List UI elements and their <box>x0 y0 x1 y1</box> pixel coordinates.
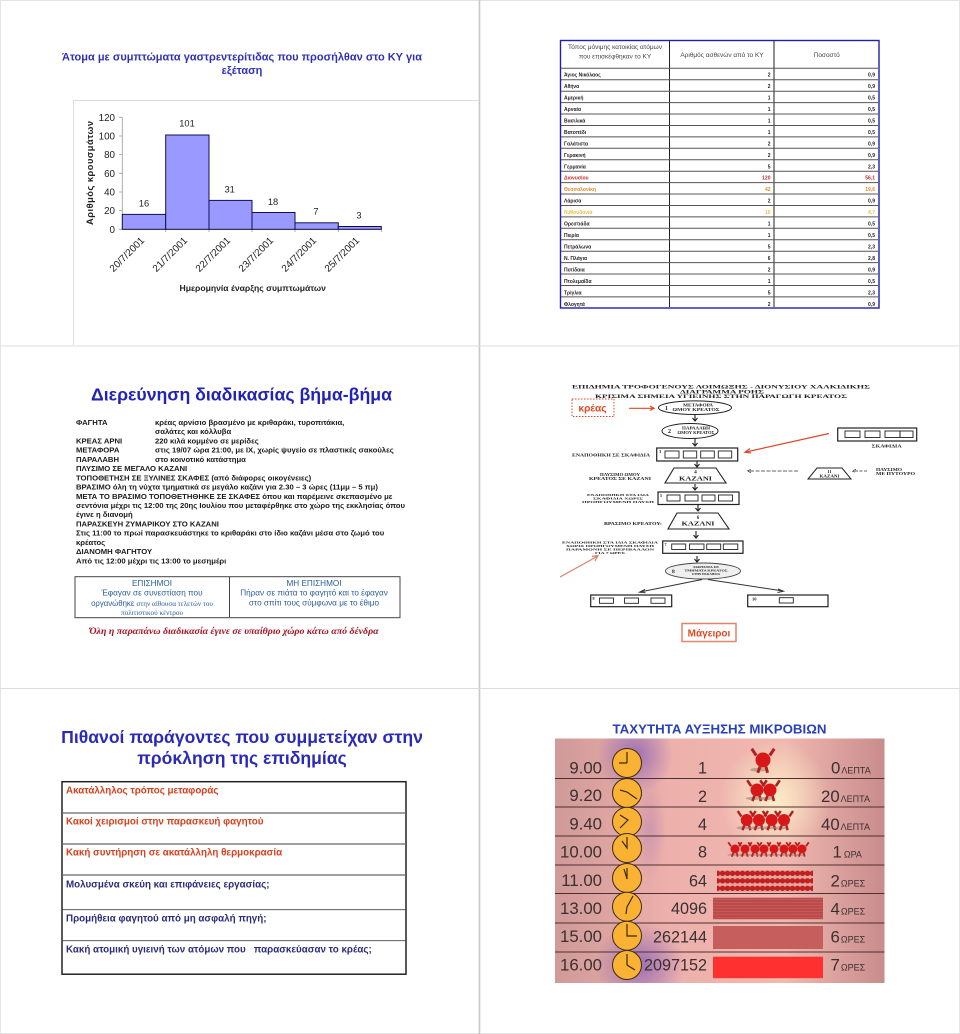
callout: meat <box>572 399 614 416</box>
table rows: Ποτίδαια <box>564 268 586 274</box>
step 7: 7 <box>664 542 666 547</box>
step 6: ΚΑΖΑΝΙ <box>682 522 715 528</box>
table rows: Αθήνα <box>564 84 580 90</box>
heading: Διερεύνηση διαδικασίας βήμα-βήμα <box>91 384 392 404</box>
step 1: ΩΜΟΥ ΚΡΕΑΤΟΣ <box>672 408 721 412</box>
table rows: 2,3 <box>868 290 875 296</box>
step 6 <box>668 513 729 529</box>
panel: possible factors <box>61 727 423 974</box>
table rows: Διονυσίου <box>564 176 589 182</box>
elapsed times: 6ΩΡΕΣ <box>830 928 866 946</box>
text block: procedure <box>76 418 405 565</box>
table rows: 1 <box>768 222 771 228</box>
step 5 <box>658 492 739 504</box>
step 2: ΩΜΟΥ ΚΡΕΑΤΟΣ <box>678 431 715 435</box>
table rows: 2,3 <box>868 244 875 250</box>
step 8: ΣΤΗΝ ΕΚΚΛΗΣΙΑ <box>692 572 721 576</box>
bar chart: cases per day: 120 <box>99 113 116 124</box>
arrow: meat to step 1 <box>629 406 654 410</box>
table rows: Ν. Πλάγια <box>564 256 588 262</box>
elapsed times: 4ΩΡΕΣ <box>830 900 866 918</box>
microbes: one to sixty-four <box>717 749 813 892</box>
bar chart: cases per day: 22/7/2001 <box>194 235 233 275</box>
callout: cooks: Μάγειροι <box>688 628 731 640</box>
table rows: Γαλάτιστα <box>564 141 589 147</box>
label step 11: ΠΛΥΣΙΜΟ <box>876 468 902 472</box>
microbe counts: 262144 <box>653 928 707 946</box>
bar chart: cases per day: 80 <box>104 150 116 161</box>
factors table: Κακοί χειρισμοί στην παρασκευή φαγητού <box>66 816 264 828</box>
table header: Τόπος μόνιμης κατοικίας ατόμων <box>568 43 662 51</box>
elapsed times: 0ΛΕΠΤΑ <box>831 758 871 778</box>
table rows: Πετράλωνα <box>564 244 592 250</box>
table rows: 1 <box>768 118 771 124</box>
table rows: 120 <box>762 176 771 182</box>
table rows: 0,9 <box>868 268 875 274</box>
table rows: 5 <box>768 244 771 250</box>
microbe counts: 4096 <box>671 900 707 918</box>
table rows: 2 <box>768 268 771 274</box>
callout: official and unofficial guests: πολιτιστικού κέντρου <box>121 609 183 617</box>
table rows: Άγιος Νικόλαος <box>564 72 601 78</box>
step 4: 4 <box>694 470 697 476</box>
table rows <box>564 72 875 308</box>
table header <box>568 43 840 60</box>
callout: official and unofficial guests: Πήραν σε πιάτα το φαγητό και το έφαγαν <box>240 588 388 598</box>
table rows: 0,5 <box>868 107 875 113</box>
bar chart: cases per day: Αριθμός κρουσμάτων <box>85 120 95 225</box>
table rows: 2 <box>768 72 771 78</box>
table rows: 42 <box>765 187 771 193</box>
bar chart: cases per day: 21/7/2001 <box>151 235 190 275</box>
bar chart: cases per day: 3 <box>356 210 362 220</box>
table rows: Αμερική <box>564 95 583 101</box>
step 2 <box>662 424 718 438</box>
heading: πρόκληση της επιδημίας <box>137 748 347 768</box>
step 10: 10 <box>752 596 757 602</box>
table header: που επισκέφθηκαν το ΚΥ <box>579 52 652 60</box>
step 6: 6 <box>697 516 700 521</box>
label step 7: ΓΙΑ 7 ΩΡΕΣ <box>595 551 626 555</box>
chart frame <box>74 100 479 345</box>
table rows: 0,9 <box>868 72 875 78</box>
label step 7: ΠΑΡΑΜΟΝΗ ΣΕ ΠΕΡΙΒΑΛΛΟΝ <box>566 548 655 552</box>
bar chart: cases per day: 0 <box>110 225 116 236</box>
step 8: 8 <box>672 569 675 575</box>
label step 5: ΣΚΑΦΙΔΙΑ ΧΩΡΙΣ <box>593 496 644 500</box>
elapsed times: 7ΩΡΕΣ <box>830 956 866 974</box>
flow diagram title: ΔΙΑΓΡΑΜΜΑ ΡΟΗΣ <box>680 390 765 396</box>
table rows: 1 <box>768 279 771 285</box>
step 8 <box>666 563 740 579</box>
arrow: to step 7 label <box>560 556 598 577</box>
table rows: 0,5 <box>868 130 875 136</box>
table rows: Βασιλικά <box>564 118 586 124</box>
table rows: Ορεστιάδα <box>564 222 591 228</box>
arrow: dashed to step 11 <box>852 470 867 472</box>
label step 5: ΠΡΟΗΓΟΥΜΕΝΗ ΠΛΥΣΗ <box>582 500 654 504</box>
text block: procedure: στις 19/07 ώρα 21:00, με ΙΧ, χωρίς ψυγείο σε πλαστικές σακούλες <box>155 446 394 455</box>
microbe counts: 8 <box>698 844 707 862</box>
microbe counts <box>644 760 707 974</box>
clocks <box>612 748 642 980</box>
table header: Ποσοστό <box>814 51 840 59</box>
text block: procedure: στο κοινοτικό κατάστημα <box>155 455 246 464</box>
table rows: 5 <box>768 164 771 170</box>
bar chart: cases per day: 23/7/2001 <box>237 235 276 275</box>
table rows: 2,3 <box>868 164 875 170</box>
panel: microbial growth rate <box>555 724 884 983</box>
table rows: Φλογητά <box>564 302 586 308</box>
bar chart: cases per day: 24/7/2001 <box>280 235 319 275</box>
table rows: Πτολεμαΐδα <box>564 279 592 285</box>
tubs: ΣΚΑΦΙΔΙΑ <box>872 444 902 448</box>
callout: meat: κρέας <box>578 404 607 414</box>
step 3 <box>657 448 738 461</box>
table rows: Ν.Μουδανιά <box>564 210 593 216</box>
table rows: 56,1 <box>865 176 875 182</box>
step 1: ΜΕΤΑΦΟΡΑ <box>683 404 714 408</box>
label step 5 <box>582 493 654 504</box>
text block: procedure: σαλάτες και κόλλυβα <box>155 427 231 436</box>
table rows: 2 <box>768 302 771 308</box>
factors table: Μολυσμένα σκεύη και επιφάνειες εργασίας; <box>66 880 269 890</box>
panel: flow diagram <box>560 384 917 642</box>
label step 11 <box>876 468 915 476</box>
flow diagram title: ΕΠΙΔΗΜΙΑ ΤΡΟΦΟΓΕΝΟΥΣ ΛΟΙΜΩΞΗΣ - ΔΙΟΝΥΣΙΟΥ ΧΑΛΚΙΔΙΚΗΣ <box>572 384 871 390</box>
step 10 <box>748 595 828 607</box>
step 2: 2 <box>668 429 671 435</box>
table rows: 0,9 <box>868 302 875 308</box>
step 5: 5 <box>660 493 662 498</box>
step 4: ΚΑΖΑΝΙ <box>679 476 713 482</box>
table rows: 0,9 <box>868 141 875 147</box>
microbe counts: 64 <box>689 872 707 890</box>
step 2: ΠΑΡΑΛΑΒΗ <box>682 426 710 430</box>
table rows: 0,5 <box>868 118 875 124</box>
flow diagram title: ΚΡΙΣΙΜΑ ΣΗΜΕΙΑ ΥΓΙΕΙΝΗΣ ΣΤΗΝ ΠΑΡΑΓΩΓΗ ΚΡΕΑΤΟΣ <box>595 394 848 400</box>
table rows: 4,7 <box>868 210 875 216</box>
callout: official and unofficial guests: ΜΗ ΕΠΙΣΗΜΟΙ <box>286 579 342 588</box>
text block: procedure: 220 κιλά κομμένο σε μερίδες <box>155 436 259 446</box>
microbes: thousands <box>713 898 823 978</box>
label step 4 <box>589 473 652 481</box>
heading <box>61 727 423 768</box>
factors table: Προμήθεια φαγητού από μη ασφαλή πηγή; <box>66 914 267 924</box>
step 3: 3 <box>659 449 662 454</box>
callout: official and unofficial guests: οργανώθηκε στην αίθουσα τελετών του <box>91 599 213 608</box>
step 9: 9 <box>592 596 594 601</box>
bar chart: cases per day: 25/7/2001 <box>323 235 362 275</box>
times <box>560 758 602 974</box>
bar chart: cases per day: 18 <box>268 197 278 207</box>
step 11: ΚΑΖΑΝΙ <box>820 474 840 478</box>
title: people with gastroenteritis <box>62 52 422 77</box>
bar chart: cases per day: 31 <box>225 184 235 194</box>
table rows: Γερακινή <box>564 153 586 159</box>
microbe counts: 2097152 <box>644 956 707 974</box>
text block: procedure: ΤΟΠΟΘΕΤΗΣΗ ΣΕ ΞΥΛΙΝΕΣ ΣΚΑΦΕΣ (από διάφορες οικογένειες) <box>76 473 312 482</box>
bar chart: cases per day: 60 <box>104 169 116 180</box>
table rows: 2 <box>768 84 771 90</box>
label step 4: ΚΡΕΑΤΟΣ ΣΕ ΚΑΖΑΝΙ <box>589 477 652 481</box>
table rows: 1 <box>768 130 771 136</box>
elapsed times: 20ΛΕΠΤΑ <box>821 787 870 806</box>
microbe counts: 1 <box>698 760 707 778</box>
table rows: 2,8 <box>868 256 875 262</box>
text block: procedure: ΜΕΤΑ ΤΟ ΒΡΑΣΙΜΟ ΤΟΠΟΘΕΤΗΘΗΚΕ ΣΕ ΣΚΑΦΕΣ όπου και παρέμεινε σκεπασμένο με <box>76 492 393 501</box>
text block: procedure: κρέας αρνίσιο βρασμένο με κριθαράκι, τυροπιτάκια, <box>155 418 344 427</box>
step 8: ΤΜΗΜΑΤΑ ΚΡΕΑΤΟΣ <box>684 568 728 572</box>
callout: official and unofficial guests: στο σπίτι τους σύμφωνα με το έθιμο <box>249 598 380 608</box>
table rows: 10 <box>765 210 771 216</box>
callout: official and unofficial guests <box>75 577 400 618</box>
label step 7: ΕΝΑΠΟΘΗΚΗ ΣΤΑ ΙΔΙΑ ΣΚΑΦΙΔΙΑ <box>562 540 659 544</box>
bar chart: cases per day: 16 <box>139 198 149 208</box>
times: 9.20 <box>569 786 602 805</box>
text block: procedure: ΠΑΡΑΣΚΕΥΗ ΖΥΜΑΡΙΚΟΥ ΣΤΟ ΚΑΖΑΝΙ <box>76 519 219 528</box>
table rows: 0,5 <box>868 279 875 285</box>
panel: residence table <box>560 40 879 308</box>
table rows: 2 <box>768 153 771 159</box>
bar chart: cases per day <box>85 113 381 293</box>
step 8: ΧΩΡΙΣΜΑ ΣΕ <box>693 565 719 569</box>
text block: procedure: ΚΡΕΑΣ ΑΡΝΙ <box>76 436 122 446</box>
label step 7: ΧΩΡΙΣ ΠΡΟΗΓΟΥΜΕΝΗ ΠΛΥΣΗ <box>566 544 654 548</box>
table header: Αριθμός ασθενών από το ΚΥ <box>680 51 764 59</box>
text block: procedure: ΠΑΡΑΛΑΒΗ <box>76 455 119 464</box>
times: 15.00 <box>560 927 602 946</box>
panel: symptom chart slide <box>62 52 479 345</box>
table rows: 2 <box>768 199 771 205</box>
tubs <box>838 428 917 448</box>
times: 10.00 <box>560 842 602 862</box>
label step 11: ΜΕ ΠΥΤΟΥΡΟ <box>876 472 915 476</box>
label step 4: ΠΛΥΣΙΜΟ ΩΜΟΥ <box>600 473 640 477</box>
bar chart: cases per day: 40 <box>104 188 116 198</box>
factors table: Κακή συντήρηση σε ακατάλληλη θερμοκρασία <box>66 848 282 858</box>
step 9 <box>591 595 672 607</box>
factors table <box>62 782 406 974</box>
elapsed times: 2ΩΡΕΣ <box>830 872 866 890</box>
table rows: Τρίγλια <box>564 290 582 296</box>
text block: procedure: ΜΕΤΑΦΟΡΑ <box>76 446 120 455</box>
table rows: 2 <box>768 141 771 147</box>
bar chart: cases per day: 20 <box>104 206 116 217</box>
table rows: 5 <box>768 290 771 296</box>
text block: procedure: ΔΙΑΝΟΜΗ ΦΑΓΗΤΟΥ <box>76 547 152 556</box>
microbe counts: 2 <box>698 788 707 806</box>
title: people with gastroenteritis: εξέταση <box>222 65 263 77</box>
times: 11.00 <box>561 871 602 890</box>
heading: Πιθανοί παράγοντες που συμμετείχαν στην <box>61 727 423 747</box>
step 7 <box>663 541 743 553</box>
note: outdoors under trees: Όλη η παραπάνω διαδικασία έγινε σε υπαίθριο χώρο κάτω από δένδρα <box>88 626 379 637</box>
table rows: 1 <box>768 233 771 239</box>
growth background <box>555 738 884 983</box>
bar chart: cases per day: 20/7/2001 <box>108 235 147 275</box>
table rows: 19,6 <box>865 187 875 193</box>
bar chart: cases per day: 100 <box>99 132 116 142</box>
title: people with gastroenteritis: Άτομα με συμπτώματα γαστρεντερίτιδας που προσήλθαν στο ΚΥ για <box>62 52 422 64</box>
table rows: 6 <box>768 256 771 262</box>
arrow: dashed to step 4 <box>747 470 798 472</box>
table rows: Γερμανία <box>564 164 587 170</box>
text block: procedure: έγινε η διανομή <box>76 510 133 519</box>
panel: step-by-step investigation <box>75 384 405 637</box>
table rows: Βατοπέδι <box>564 130 587 136</box>
table rows: Πιερία <box>564 233 580 239</box>
arrows: to steps 9 and 10 <box>640 580 784 593</box>
text block: procedure: ΒΡΑΣΙΜΟ όλη τη νύχτα τμηματικά σε μεγάλο καζάνι για 2.30 – 3 ώρες (11μμ – 5 πμ) <box>76 482 378 492</box>
callout: cooks <box>682 624 736 642</box>
text block: procedure: ΠΛΥΣΙΜΟ ΣΕ ΜΕΓΑΛΟ ΚΑΖΑΝΙ <box>76 464 187 473</box>
label step 3: ΕΝΑΠΟΘΗΚΗ ΣΕ ΣΚΑΦΙΔΙΑ <box>572 454 650 458</box>
elapsed times <box>821 758 871 974</box>
text block: procedure: ΦΑΓΗΤΑ <box>76 418 108 427</box>
table rows: Λάρισα <box>564 199 582 205</box>
heading: ΤΑΧΥΤΗΤΑ ΑΥΞΗΣΗΣ ΜΙΚΡΟΒΙΩΝ <box>613 722 826 736</box>
factors table: Ακατάλληλος τρόπος μεταφοράς <box>66 786 218 796</box>
table rows: 0,9 <box>868 84 875 90</box>
label step 7 <box>562 540 659 555</box>
table rows: 0,9 <box>868 199 875 205</box>
bar chart: cases per day: 101 <box>179 118 195 128</box>
text block: procedure: κρέατος <box>76 538 105 547</box>
table rows: Αρναία <box>564 107 582 113</box>
text block: procedure: Από τις 12:00 μέχρι τις 13:00 το μεσημέρι <box>76 556 226 565</box>
label step 6: ΒΡΑΣΙΜΟ ΚΡΕΑΤΟΥ: <box>604 522 662 526</box>
arrow: tubs to step 3 <box>745 434 829 453</box>
callout: official and unofficial guests: Έφαγαν σε συνεστίαση που <box>100 588 203 598</box>
times: 9.00 <box>569 758 602 778</box>
table rows: 0,9 <box>868 153 875 159</box>
table rows: 0,5 <box>868 95 875 101</box>
times: 9.40 <box>569 814 602 834</box>
times: 13.00 <box>560 899 602 918</box>
callout: official and unofficial guests: ΕΠΙΣΗΜΟΙ <box>132 579 172 588</box>
text block: procedure: σεντόνια μέχρι τις 12:00 της 20ης Ιουλίου που μεταφέρθηκε στο χώρο της εκκλησίας όπου <box>76 501 405 510</box>
bar chart: cases per day: Ημερομηνία έναρξης συμπτωμάτων <box>179 283 326 293</box>
elapsed times: 40ΛΕΠΤΑ <box>821 815 870 834</box>
flow diagram title <box>572 384 871 400</box>
label step 5: ΕΝΑΠΟΘΗΚΗ ΣΤΑ ΙΔΙΑ <box>587 493 650 497</box>
table rows: Θεσσαλονίκη <box>564 187 596 193</box>
table rows: 1 <box>768 95 771 101</box>
arrows: flow down <box>692 415 700 562</box>
step 4 <box>665 468 726 483</box>
table rows: 1 <box>768 107 771 113</box>
bar chart: cases per day: 7 <box>313 206 319 216</box>
factors table: Κακή ατομική υγιεινή των ατόμων που παρασκεύασαν το κρέας; <box>66 944 372 956</box>
table rows: 0,5 <box>868 222 875 228</box>
step 11 <box>808 468 851 479</box>
step 11: 11 <box>827 469 832 474</box>
table rows: 0,5 <box>868 233 875 239</box>
microbe counts: 4 <box>698 816 707 834</box>
step 1: 1 <box>665 406 668 412</box>
elapsed times: 1ΩΡΑ <box>832 842 862 862</box>
text block: procedure: Στις 11:00 το πρωί παρασκευάστηκε το κριθαράκι στο ίδιο καζάνι μέσα στο ζωμό του <box>76 529 385 538</box>
times: 16.00 <box>560 956 602 974</box>
step 1 <box>658 401 732 415</box>
